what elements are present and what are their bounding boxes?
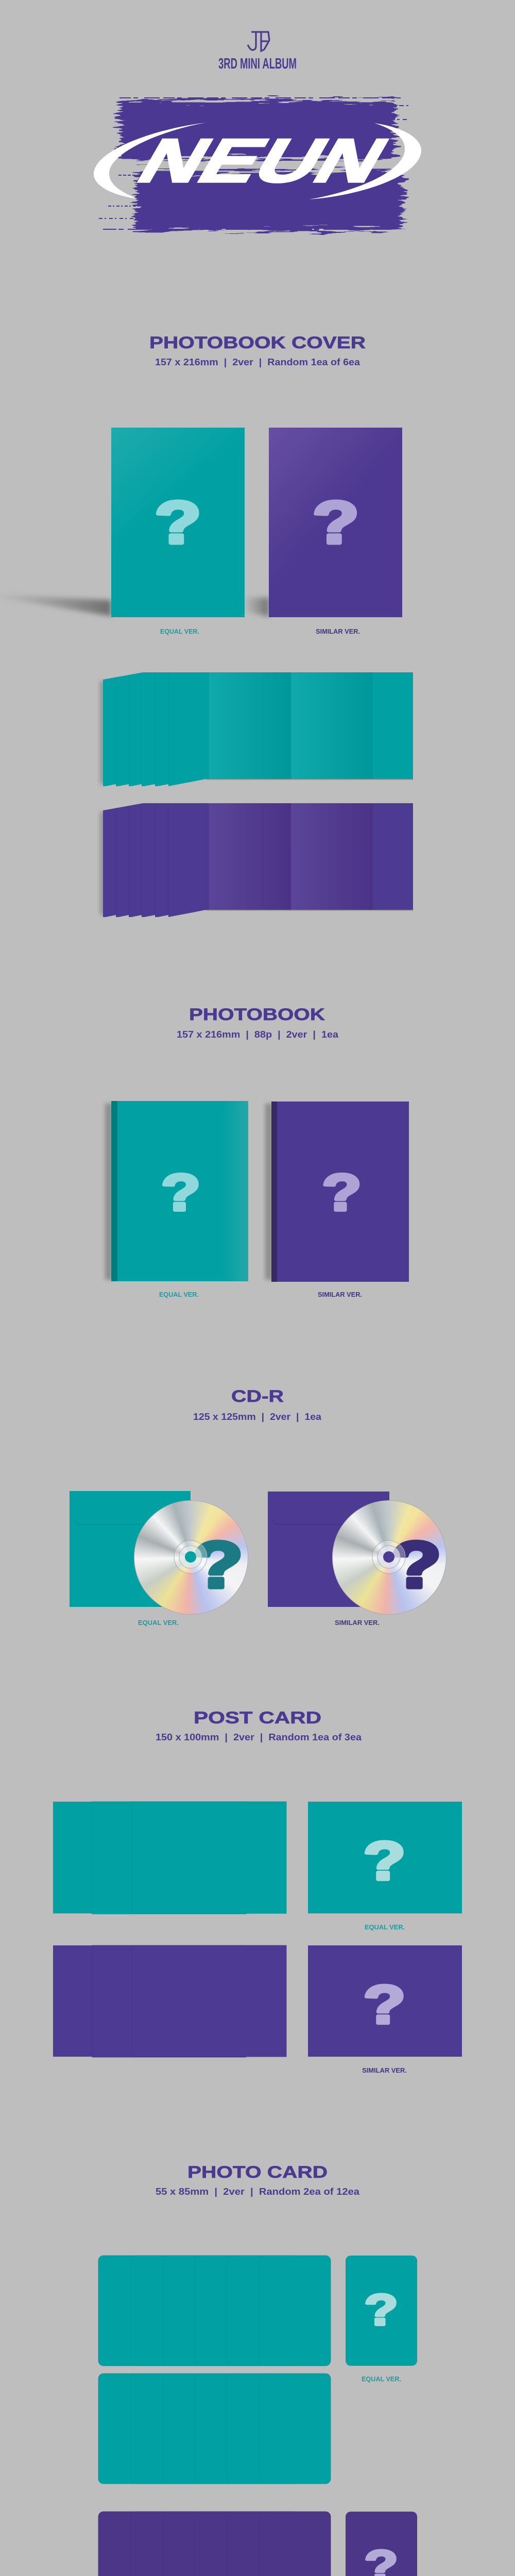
icon: question mark: ? <box>364 1831 405 1891</box>
cast shadow: right card <box>245 598 269 617</box>
disc <box>134 1500 248 1615</box>
panel: photobook <box>105 1005 409 1298</box>
icon: question mark: ? <box>313 489 359 556</box>
single card: similar <box>308 1945 462 2057</box>
spec line: 157 x 216mm | 2ver | Random 1ea of 6ea <box>155 357 360 367</box>
icon: question mark: ? <box>193 1528 243 1601</box>
heading: PHOTO CARD <box>187 2163 328 2181</box>
icon: question mark: ? <box>364 2286 398 2334</box>
icon: question mark: ? <box>322 1164 362 1221</box>
label: similar: SIMILAR VER. <box>316 628 360 635</box>
cast shadow: left card <box>0 595 111 616</box>
label: similar: SIMILAR VER. <box>335 1619 380 1626</box>
card row: similar 1 <box>98 2512 331 2576</box>
label: equal: EQUAL VER. <box>365 1923 405 1931</box>
disc hub <box>174 1540 207 1573</box>
envelope <box>70 1491 191 1607</box>
label: similar: SIMILAR VER. <box>362 2066 407 2074</box>
single card: similar <box>346 2512 417 2576</box>
icon: question mark: ? <box>154 489 201 556</box>
panel: CD-R <box>70 1387 447 1626</box>
stacked cards: similar <box>53 1945 286 2057</box>
icon: question mark: ? <box>391 1528 441 1601</box>
spec line: 150 x 100mm | 2ver | Random 1ea of 3ea <box>156 1732 362 1742</box>
spine <box>271 1101 277 1282</box>
swoosh: right <box>309 123 421 199</box>
card row: equal 2 <box>98 2374 331 2484</box>
single card: equal <box>308 1802 462 1913</box>
heading: CD-R <box>231 1387 284 1405</box>
disc hub <box>372 1540 405 1573</box>
stacked cards: equal <box>53 1802 286 1914</box>
heading: PHOTOBOOK COVER <box>149 333 366 352</box>
single card: equal <box>346 2256 417 2366</box>
header <box>218 32 297 72</box>
book: similar version <box>265 1101 409 1282</box>
icon: question mark: ? <box>161 1164 200 1221</box>
CD set: similar <box>268 1492 447 1615</box>
fan of covers: equal <box>100 672 413 787</box>
spec line: 157 x 216mm | 88p | 2ver | 1ea <box>177 1029 339 1040</box>
brush stroke <box>99 98 411 231</box>
logo: NEUN on brush stroke <box>94 98 421 231</box>
CD set: equal <box>70 1491 248 1615</box>
label: equal: EQUAL VER. <box>138 1619 179 1626</box>
wordmark: NEUN <box>125 126 401 195</box>
icon: JB logo <box>248 32 269 51</box>
label: equal: EQUAL VER. <box>362 2375 401 2383</box>
card row: equal 1 <box>98 2256 331 2366</box>
card: equal version <box>111 428 245 617</box>
disc <box>332 1500 447 1615</box>
fan of covers: similar <box>100 803 413 918</box>
panel: photo card <box>98 2163 417 2576</box>
album label: 3RD MINI ALBUM <box>218 56 297 72</box>
heading: PHOTOBOOK <box>189 1005 325 1024</box>
spec line: 55 x 85mm | 2ver | Random 2ea of 12ea <box>156 2187 360 2197</box>
spine <box>111 1101 117 1281</box>
label: equal: EQUAL VER. <box>160 628 199 635</box>
book: equal version <box>105 1101 248 1281</box>
panel: photobook cover <box>0 333 413 918</box>
panel: post card <box>53 1708 462 2074</box>
icon: question mark: ? <box>364 1974 405 2035</box>
label: equal: EQUAL VER. <box>159 1291 199 1298</box>
envelope <box>268 1492 389 1607</box>
spec line: 125 x 125mm | 2ver | 1ea <box>193 1412 322 1422</box>
label: similar: SIMILAR VER. <box>318 1291 362 1298</box>
heading: POST CARD <box>194 1708 321 1727</box>
swoosh: left <box>94 123 206 199</box>
card: similar version <box>269 428 402 617</box>
